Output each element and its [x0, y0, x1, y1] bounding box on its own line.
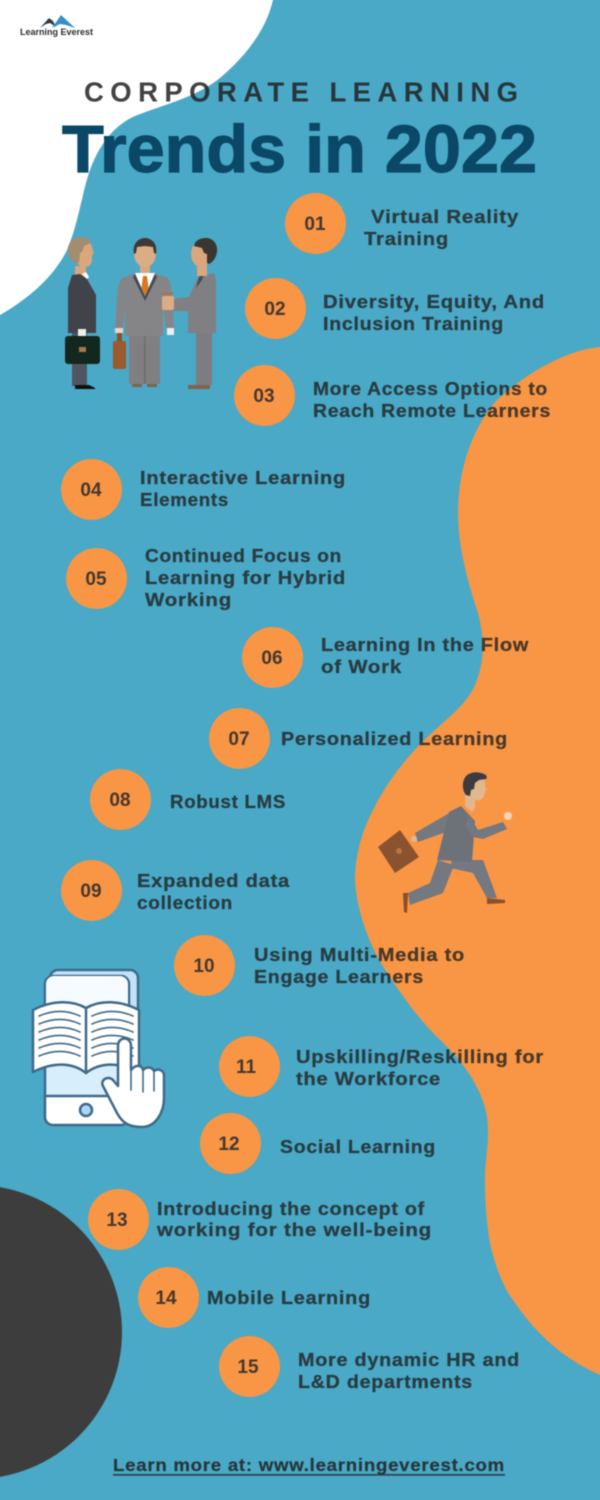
- text 09: [137, 871, 290, 913]
- badge 01: [285, 193, 346, 254]
- item 13: [88, 1189, 432, 1250]
- middle man: [113, 238, 174, 387]
- front leg: [450, 860, 497, 898]
- text 05: Continued Focus on: [145, 546, 342, 566]
- front arm: [465, 815, 507, 839]
- badge 11: 11: [236, 1057, 256, 1078]
- text 10: [254, 945, 465, 987]
- item 09: [61, 860, 290, 921]
- text 09: Expanded data: [137, 871, 290, 891]
- badge 13: [88, 1189, 149, 1250]
- text 01: [364, 207, 519, 249]
- back hand: [411, 836, 417, 842]
- text 09: collection: [137, 893, 233, 913]
- item 08: [90, 769, 286, 830]
- badge 02: [245, 278, 306, 339]
- text 14: Mobile Learning: [207, 1288, 371, 1308]
- head: [463, 772, 487, 800]
- text 12: Social Learning: [280, 1137, 436, 1157]
- home button: [80, 1104, 92, 1116]
- text 07: Personalized Learning: [281, 729, 508, 749]
- book lines: [39, 1012, 133, 1056]
- badge 09: [61, 860, 122, 921]
- left man: [65, 237, 100, 389]
- item 01: [285, 193, 519, 254]
- back arm: [415, 808, 458, 842]
- orange blob: [355, 347, 600, 1378]
- item 04: [61, 459, 346, 520]
- text 04: Interactive Learning: [140, 468, 346, 488]
- text 03: More Access Options to: [313, 379, 548, 399]
- badge 15: 15: [237, 1357, 259, 1378]
- badge 04: [61, 459, 122, 520]
- text 13: Introducing the concept of: [157, 1199, 425, 1219]
- item 05: [66, 546, 346, 610]
- item 06: [242, 627, 529, 688]
- jacket: [437, 806, 475, 862]
- text 15: L&D departments: [298, 1372, 473, 1392]
- right man: [161, 238, 217, 389]
- dark circle: [0, 1185, 122, 1479]
- logo: [20, 15, 93, 37]
- text 05: Working: [145, 590, 232, 610]
- badge 01: 01: [304, 214, 326, 235]
- text 15: More dynamic HR and: [298, 1350, 520, 1370]
- tablet front: [45, 976, 129, 1125]
- neck: [465, 795, 475, 812]
- text 11: [296, 1047, 544, 1089]
- badge 09: 09: [80, 881, 102, 902]
- title: corporate learning: CORPORATE LEARNING: [84, 76, 518, 108]
- badge 15: [219, 1336, 280, 1397]
- logo text: Learning Everest: [20, 27, 93, 37]
- text 10: Engage Learners: [254, 967, 424, 987]
- illustration: running businessman: [378, 772, 512, 913]
- text 04: [140, 468, 346, 510]
- badge 10: 10: [193, 956, 215, 977]
- text 11: Upskilling/Reskilling for: [296, 1047, 544, 1067]
- item 14: [138, 1267, 371, 1328]
- text 11: the Workforce: [296, 1069, 441, 1089]
- text 13: [156, 1199, 432, 1240]
- text 05: [145, 546, 346, 610]
- text 02: [323, 292, 545, 334]
- book spine: [85, 1008, 87, 1073]
- item 07: [209, 708, 508, 769]
- badge 07: [209, 708, 270, 769]
- item 12: [200, 1113, 436, 1174]
- badge 08: [90, 769, 151, 830]
- badge 05: [66, 548, 127, 609]
- badge 12: [200, 1113, 261, 1174]
- item 11: [219, 1036, 544, 1097]
- white blob: [0, 0, 276, 320]
- badge 06: [242, 627, 303, 688]
- back shoe: [403, 893, 408, 913]
- tablet screen top: [46, 976, 128, 1024]
- illustration: three businessmen: [65, 237, 217, 389]
- text 06: [321, 635, 529, 677]
- badge 07: 07: [228, 729, 250, 750]
- open book: [33, 1002, 139, 1073]
- front hand: [504, 812, 512, 820]
- badge 03: [234, 365, 295, 426]
- text 06: Learning In the Flow: [321, 635, 529, 655]
- item 15: [219, 1336, 520, 1397]
- badge 13: 13: [106, 1210, 128, 1231]
- text 03: [313, 379, 551, 421]
- badge 06: 06: [261, 648, 283, 669]
- text 13: working for the well-being: [156, 1220, 432, 1240]
- text 08: Robust LMS: [170, 792, 286, 812]
- badge 08: 08: [109, 790, 131, 811]
- tablet back: [50, 970, 138, 1090]
- text 04: Elements: [140, 490, 229, 510]
- item 02: [245, 278, 545, 339]
- text 05: Learning for Hybrid: [145, 568, 346, 588]
- finger lines: [131, 1070, 154, 1092]
- footer link: Learn more at: www.learningeverest.com: [113, 1455, 505, 1475]
- badge 03: 03: [253, 386, 275, 407]
- back leg: [408, 860, 454, 905]
- text 10: Using Multi-Media to: [254, 945, 465, 965]
- front shoe: [487, 898, 505, 904]
- text 06: of Work: [321, 657, 402, 677]
- text 01: Training: [364, 229, 449, 249]
- hand: [102, 1038, 164, 1127]
- text 02: Diversity, Equity, And: [323, 292, 545, 312]
- text 03: Reach Remote Learners: [313, 401, 551, 421]
- item 10: [174, 935, 465, 996]
- item 03: [234, 365, 551, 426]
- text 02: Inclusion Training: [323, 314, 504, 334]
- badge 14: 14: [155, 1288, 177, 1309]
- text 15: [298, 1350, 520, 1392]
- illustration: tablet with book and hand: [33, 970, 164, 1127]
- logo mountains: [40, 15, 75, 28]
- badge 10: [174, 935, 235, 996]
- badge 12: 12: [218, 1134, 240, 1155]
- badge 05: 05: [85, 569, 107, 590]
- briefcase: [378, 830, 419, 873]
- tablet home bar: [45, 1096, 129, 1125]
- badge 11: [219, 1036, 280, 1097]
- badge 02: 02: [264, 299, 286, 320]
- title: trends in 2022: Trends in 2022: [62, 112, 537, 187]
- badge 04: 04: [80, 480, 102, 501]
- badge 14: [138, 1267, 199, 1328]
- text 01: Virtual Reality: [371, 207, 519, 227]
